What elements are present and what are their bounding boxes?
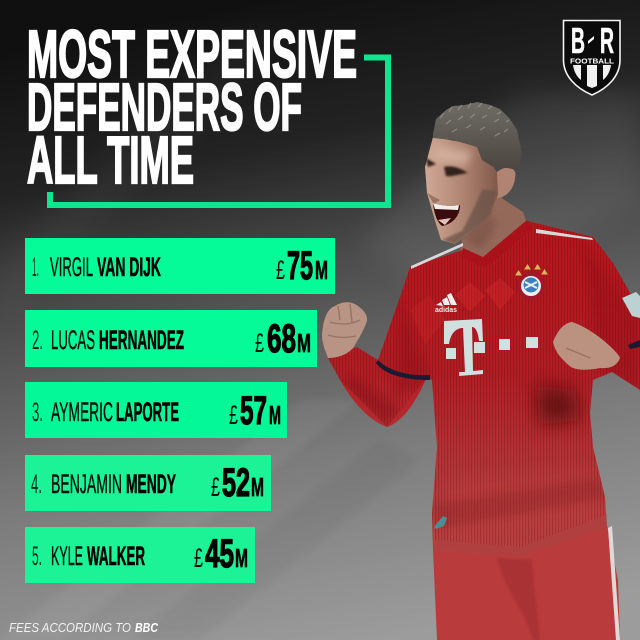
row 5: KYLE bbox=[51, 541, 83, 571]
row 4 bbox=[25, 455, 271, 511]
sleeve patch bbox=[622, 292, 640, 318]
row 5: 45 bbox=[205, 532, 234, 576]
eye and brow bbox=[426, 158, 468, 176]
row 4: 52 bbox=[222, 461, 250, 505]
row 3: LAPORTE bbox=[116, 397, 179, 427]
row 2: 2. bbox=[32, 325, 43, 355]
row 1: 75 bbox=[287, 244, 313, 288]
logo: B/R Football shield: FOOTBALL bbox=[570, 58, 615, 66]
row 1: 1. bbox=[32, 252, 39, 282]
left fist bbox=[322, 302, 367, 358]
row 3: AYMERIC bbox=[51, 397, 113, 427]
row 4: MENDY bbox=[126, 469, 176, 499]
row 3: 3. bbox=[32, 397, 43, 427]
row 4: BENJAMIN bbox=[51, 469, 122, 499]
telekom logo bbox=[444, 319, 538, 376]
row 5: 5. bbox=[32, 541, 42, 571]
green title bracket bbox=[50, 58, 388, 205]
hair bbox=[433, 102, 522, 170]
source footnote: BBC bbox=[135, 620, 158, 635]
shorts bbox=[433, 525, 620, 640]
adidas logo bbox=[435, 293, 457, 314]
row 4: 4. bbox=[31, 469, 42, 499]
row 5: £ bbox=[194, 543, 203, 573]
row 1: M bbox=[315, 255, 328, 285]
row 4: M bbox=[251, 472, 264, 502]
ear bbox=[497, 168, 515, 198]
player photo bbox=[320, 102, 640, 640]
neck shadow bbox=[463, 215, 498, 250]
jersey bbox=[320, 210, 640, 560]
ranking list bbox=[25, 238, 335, 583]
row 5: WALKER bbox=[87, 541, 145, 571]
adidas logo: adidas bbox=[435, 305, 457, 314]
underarm navy bands bbox=[376, 340, 640, 380]
shoulder stripes bbox=[411, 229, 593, 269]
row 1 bbox=[25, 238, 335, 294]
hem bbox=[433, 515, 607, 557]
logo: B/R Football shield: B bbox=[571, 20, 585, 61]
row 3: £ bbox=[229, 400, 238, 430]
row 3 bbox=[25, 382, 287, 438]
row 1: £ bbox=[276, 255, 285, 285]
row 2: HERNANDEZ bbox=[99, 325, 184, 355]
right fist bbox=[553, 322, 620, 370]
title: DEFENDERS OF bbox=[27, 70, 302, 145]
row 1: VIRGIL bbox=[50, 252, 93, 282]
row 2: £ bbox=[255, 328, 264, 358]
title: ALL TIME bbox=[27, 123, 194, 198]
beard bbox=[442, 190, 497, 244]
row 5 bbox=[25, 527, 255, 583]
title: MOST EXPENSIVE bbox=[27, 17, 357, 92]
row 5: M bbox=[235, 543, 248, 573]
hem badge bbox=[434, 516, 447, 529]
row 4: £ bbox=[211, 472, 220, 502]
row 2 bbox=[25, 310, 317, 367]
logo: B/R Football shield bbox=[564, 20, 620, 95]
mouth bbox=[433, 203, 460, 226]
row 2: M bbox=[297, 328, 311, 358]
neck bbox=[460, 195, 530, 264]
row 2: LUCAS bbox=[51, 325, 95, 355]
club crest bbox=[516, 265, 547, 300]
forehead highlight bbox=[434, 146, 472, 166]
logo: B/R Football shield: R bbox=[600, 20, 614, 61]
head bbox=[425, 102, 522, 244]
fist knuckle shading bbox=[328, 304, 590, 358]
source footnote: FEES ACCORDING TO bbox=[9, 620, 131, 635]
row 1: VAN DIJK bbox=[97, 252, 161, 282]
title bbox=[27, 17, 357, 198]
row 3: 57 bbox=[240, 389, 267, 433]
row 3: M bbox=[269, 400, 281, 430]
face bbox=[425, 137, 498, 244]
collar bbox=[461, 220, 532, 268]
row 2: 68 bbox=[267, 317, 296, 361]
cheek shadow bbox=[427, 193, 440, 204]
